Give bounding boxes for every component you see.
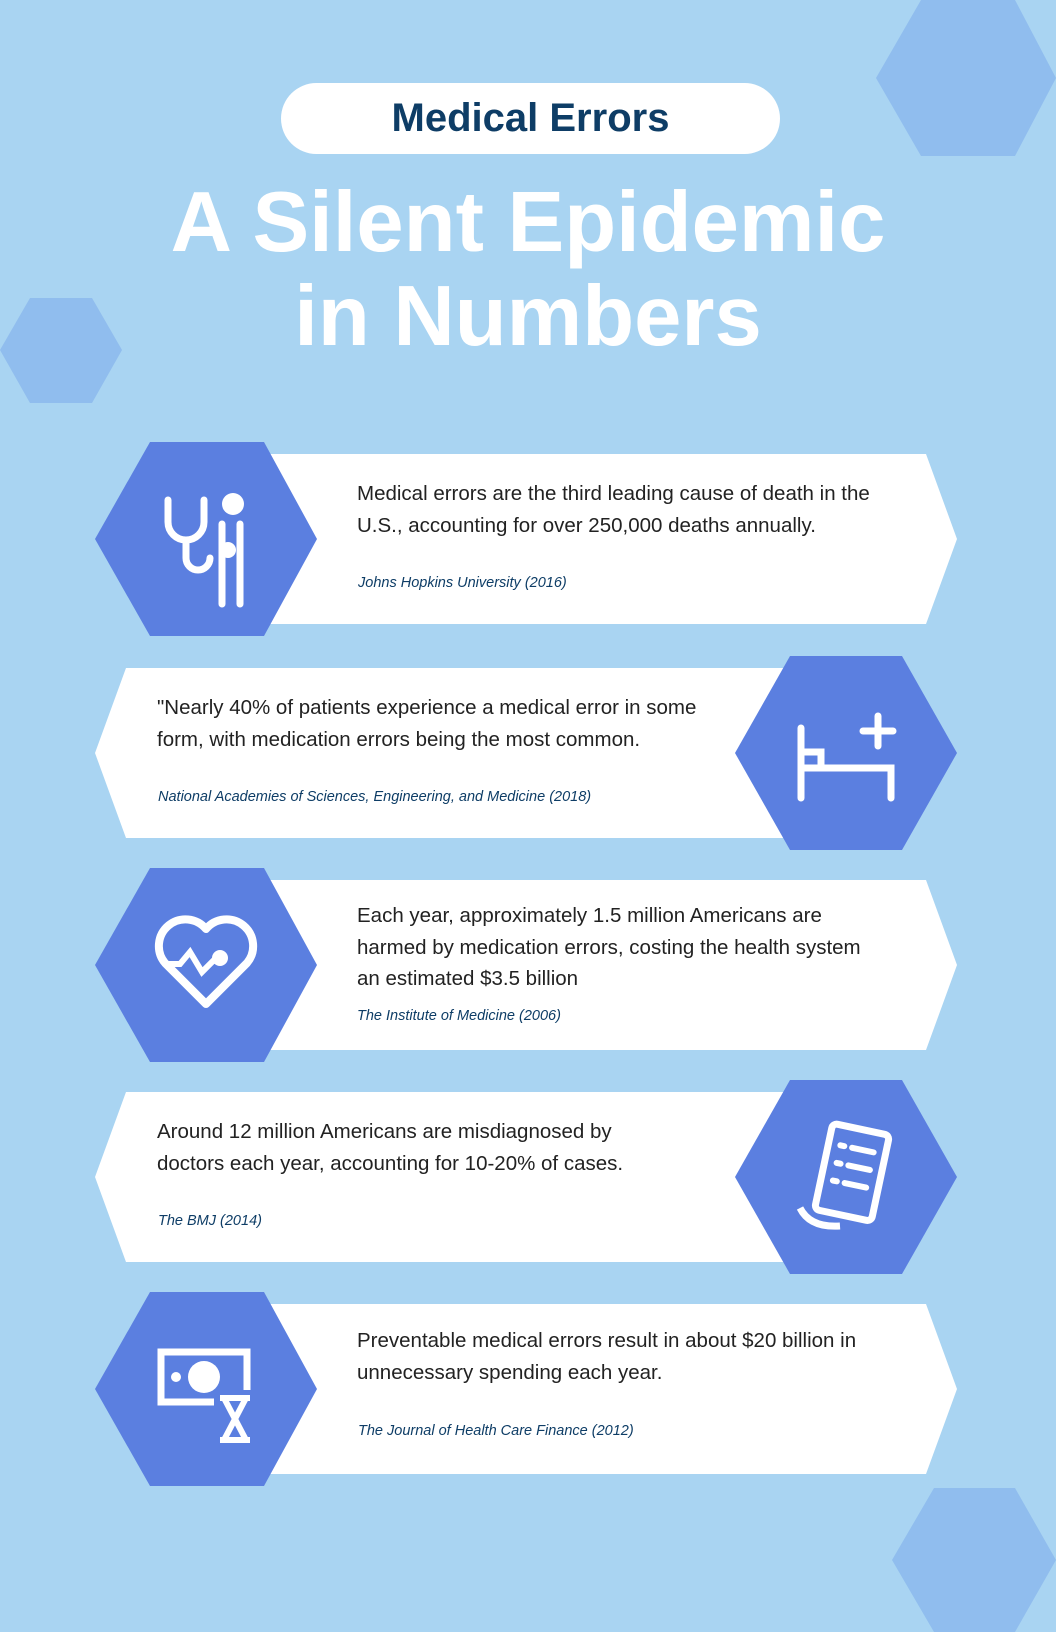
card 4	[95, 1080, 957, 1274]
card 2	[95, 656, 957, 850]
source: Johns Hopkins University (2016)	[358, 575, 567, 591]
text: Medical errors are the third leading cause of death in the U.S., accounting for over 250,000 deaths annually.	[357, 482, 870, 536]
header pill: Medical Errors	[392, 96, 669, 140]
source: The BMJ (2014)	[158, 1213, 262, 1229]
title: A Silent Epidemic	[171, 175, 885, 270]
text: "Nearly 40% of patients experience a medical error in some form, with medication errors being the most common.	[157, 696, 696, 750]
text: Preventable medical errors result in about $20 billion in unnecessary spending each year.	[357, 1329, 856, 1384]
source: The Institute of Medicine (2006)	[357, 1008, 561, 1024]
title	[171, 175, 885, 364]
source: The Journal of Health Care Finance (2012)	[358, 1423, 634, 1439]
text: Each year, approximately 1.5 million Americans are harmed by medication errors, costing the health system an estimated $3.5 billion	[357, 904, 861, 990]
card 3	[95, 868, 957, 1062]
card 1	[95, 442, 957, 636]
text: Around 12 million Americans are misdiagnosed by doctors each year, accounting for 10-20% of cases.	[157, 1120, 623, 1174]
card 5	[95, 1292, 957, 1486]
header pill	[281, 83, 780, 154]
title: in Numbers	[294, 269, 762, 364]
source: National Academies of Sciences, Engineering, and Medicine (2018)	[158, 789, 591, 805]
